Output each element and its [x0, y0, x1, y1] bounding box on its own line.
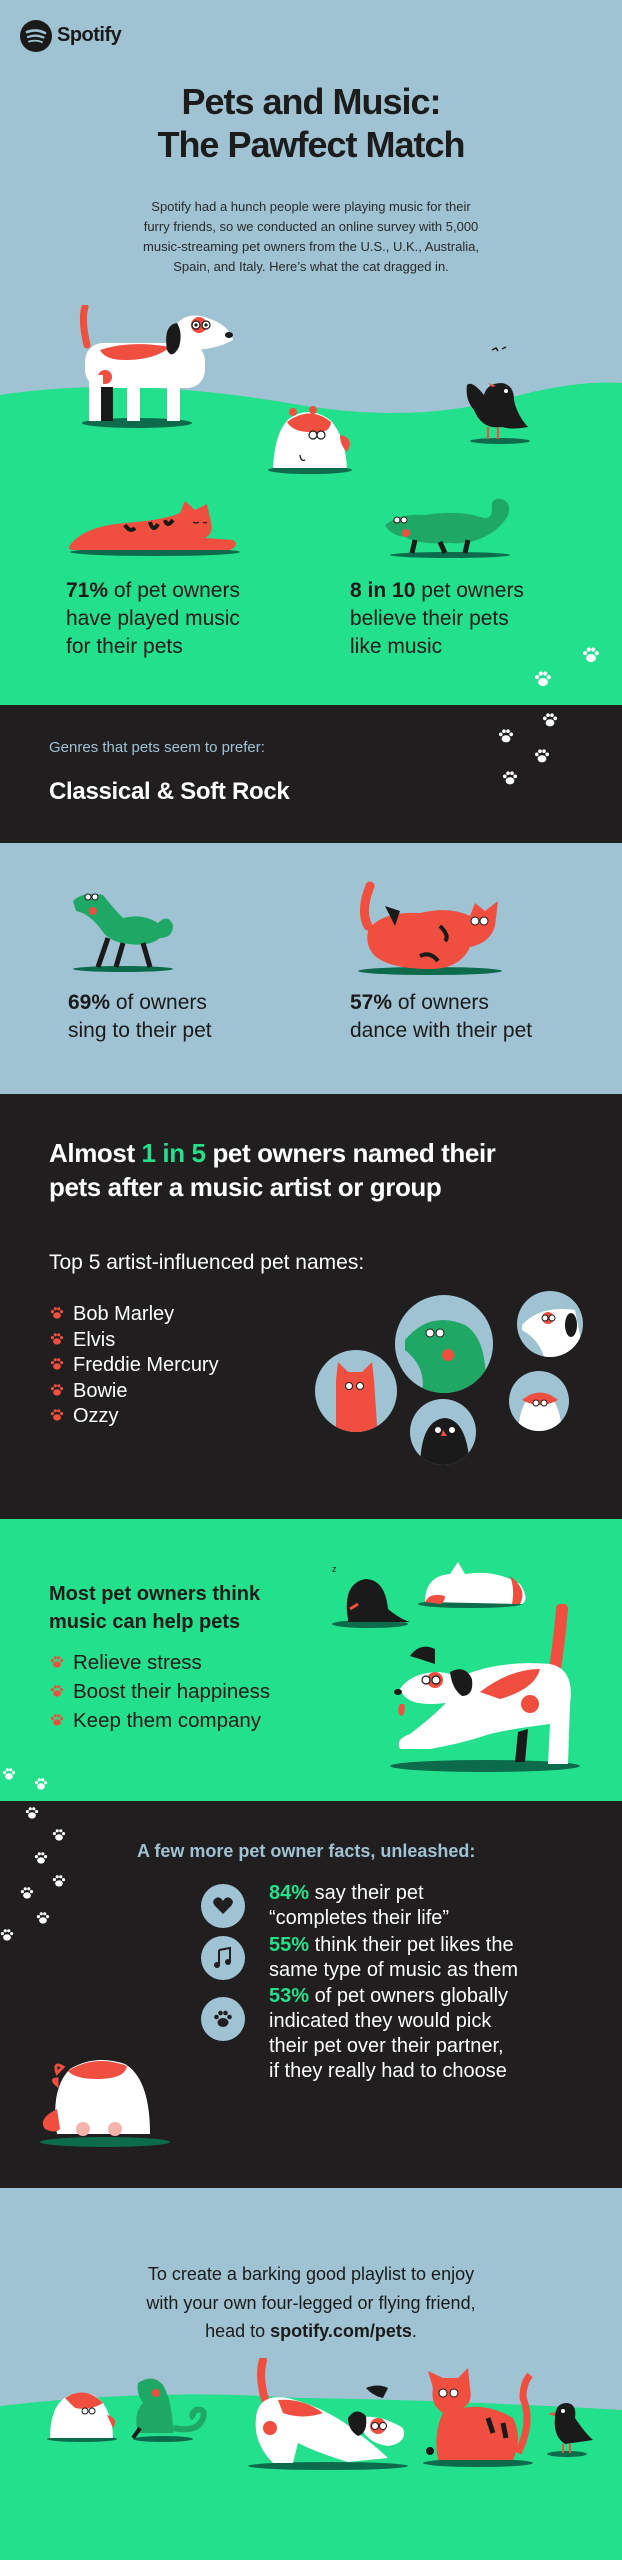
stat: 71%: 71% of pet owners	[66, 579, 240, 602]
title: The Pawfect Match	[157, 124, 465, 165]
stat: 71%: have played music	[66, 607, 240, 630]
stat: 69%: 69% of owners	[68, 991, 207, 1014]
decorative paws white	[535, 648, 599, 686]
intro paragraph: furry friends, so we conducted an online survey with 5,000	[144, 219, 478, 234]
illustration: hamster from back	[40, 2060, 170, 2147]
fact 84%: 84% say their pet	[269, 1882, 424, 1904]
fact 53%	[201, 1985, 508, 2082]
bottom hill	[0, 2394, 622, 2560]
bullet list	[50, 1651, 270, 1732]
intro paragraph: Spotify had a hunch people were playing music for their	[151, 199, 471, 214]
CTA text: with your own four-legged or flying friend,	[146, 2292, 476, 2312]
headline: Almost 1 in 5 pet owners named their	[49, 1138, 496, 1168]
illustration: playing cat	[423, 2368, 533, 2467]
headline: pets after a music artist or group	[49, 1172, 441, 1202]
section: intro (blue sky with green hill)	[0, 0, 622, 705]
heading: music can help pets	[49, 1611, 240, 1633]
CTA text	[146, 2264, 476, 2341]
paws	[498, 713, 558, 784]
heading	[49, 1583, 260, 1633]
title: Pets and Music:	[181, 81, 441, 122]
illustration: lying cat	[69, 501, 240, 556]
heading: Most pet owners think	[49, 1583, 260, 1605]
bullet list: Relieve stress	[73, 1651, 202, 1674]
illustration: chameleon	[385, 498, 510, 558]
stat: 8 in 10: like music	[350, 635, 442, 658]
icon: paw	[201, 1997, 245, 2041]
genres label: Genres that pets seem to prefer:	[49, 739, 265, 756]
stat: 8 in 10	[350, 579, 524, 658]
stat: 69%	[68, 991, 212, 1042]
section: genres	[0, 705, 622, 843]
fact 53%: if they really had to choose	[269, 2060, 507, 2082]
fact 55%	[201, 1934, 518, 1981]
section: pet names	[0, 1094, 622, 1519]
paw trail	[0, 1807, 66, 1941]
bullet list: Keep them company	[73, 1709, 261, 1732]
illustration: standing chameleon	[73, 894, 173, 972]
bullet list: Boost their happiness	[73, 1680, 270, 1703]
stat: 57%: 57% of owners	[350, 991, 489, 1014]
logo: Spotify	[20, 20, 122, 52]
stat: 71%	[66, 579, 240, 658]
list of names: Elvis	[73, 1328, 115, 1350]
illustration: standing dog	[80, 305, 233, 428]
section: music helps pets	[0, 1519, 622, 1801]
illustration: singing bird	[466, 346, 530, 444]
fact 53%: 53% of pet owners globally	[269, 1985, 508, 2007]
subheading: Top 5 artist-influenced pet names:	[49, 1251, 364, 1274]
fact 84%	[201, 1882, 449, 1929]
fact 53%: their pet over their partner,	[269, 2035, 504, 2057]
background hill	[0, 382, 622, 705]
fact 55%: same type of music as them	[269, 1959, 518, 1981]
genres value: Classical & Soft Rock	[49, 778, 289, 805]
intro paragraph: music-streaming pet owners from the U.S., U.K., Australia,	[143, 239, 479, 254]
illustration: hamster	[47, 2392, 117, 2442]
stat: 57%	[350, 991, 532, 1042]
stat: 57%: dance with their pet	[350, 1019, 532, 1042]
stat: 8 in 10: believe their pets	[350, 607, 509, 630]
illustration: sleeping bird and lying dog	[332, 1562, 526, 1628]
illustration: dancing cat	[358, 882, 502, 975]
stat: 69%: sing to their pet	[68, 1019, 212, 1042]
fact 53%: indicated they would pick	[269, 2010, 491, 2032]
intro paragraph: Spain, and Italy. Here’s what the cat dragged in.	[173, 259, 449, 274]
pet portrait circles	[315, 1291, 583, 1465]
section: more facts	[0, 1801, 622, 2188]
fact 84%: “completes their life”	[269, 1907, 449, 1929]
CTA text: To create a barking good playlist to enjoy	[148, 2264, 474, 2284]
icon: heart	[201, 1884, 245, 1928]
CTA text: head to spotify.com/pets.	[205, 2321, 417, 2341]
headline	[49, 1138, 496, 1202]
stat: 8 in 10: 8 in 10 pet owners	[350, 579, 524, 602]
title	[157, 81, 465, 165]
icon: music note	[201, 1936, 245, 1980]
list of names: Freddie Mercury	[73, 1354, 219, 1376]
illustration: hamster	[268, 406, 352, 474]
fact 55%: 55% think their pet likes the	[269, 1934, 514, 1956]
intro paragraph	[143, 199, 479, 274]
illustration: sleeping bird and lying dog: z	[332, 1564, 337, 1574]
section: call to action	[0, 2188, 622, 2560]
illustration: bowing dog	[390, 1604, 580, 1772]
heading: A few more pet owner facts, unleashed:	[137, 1841, 475, 1861]
stat: 71%: for their pets	[66, 635, 183, 658]
logo: Spotify: Spotify	[57, 24, 121, 46]
list of names: Bowie	[73, 1380, 127, 1402]
list of names: Ozzy	[73, 1405, 119, 1427]
list of names: Bob Marley	[73, 1303, 174, 1325]
illustration: bird	[547, 2403, 593, 2457]
list of names	[50, 1303, 219, 1427]
section: sing & dance	[0, 843, 622, 1094]
illustration: sitting chameleon	[131, 2378, 207, 2442]
illustration: bowing dog	[248, 2358, 408, 2470]
paws	[2, 1768, 48, 1790]
